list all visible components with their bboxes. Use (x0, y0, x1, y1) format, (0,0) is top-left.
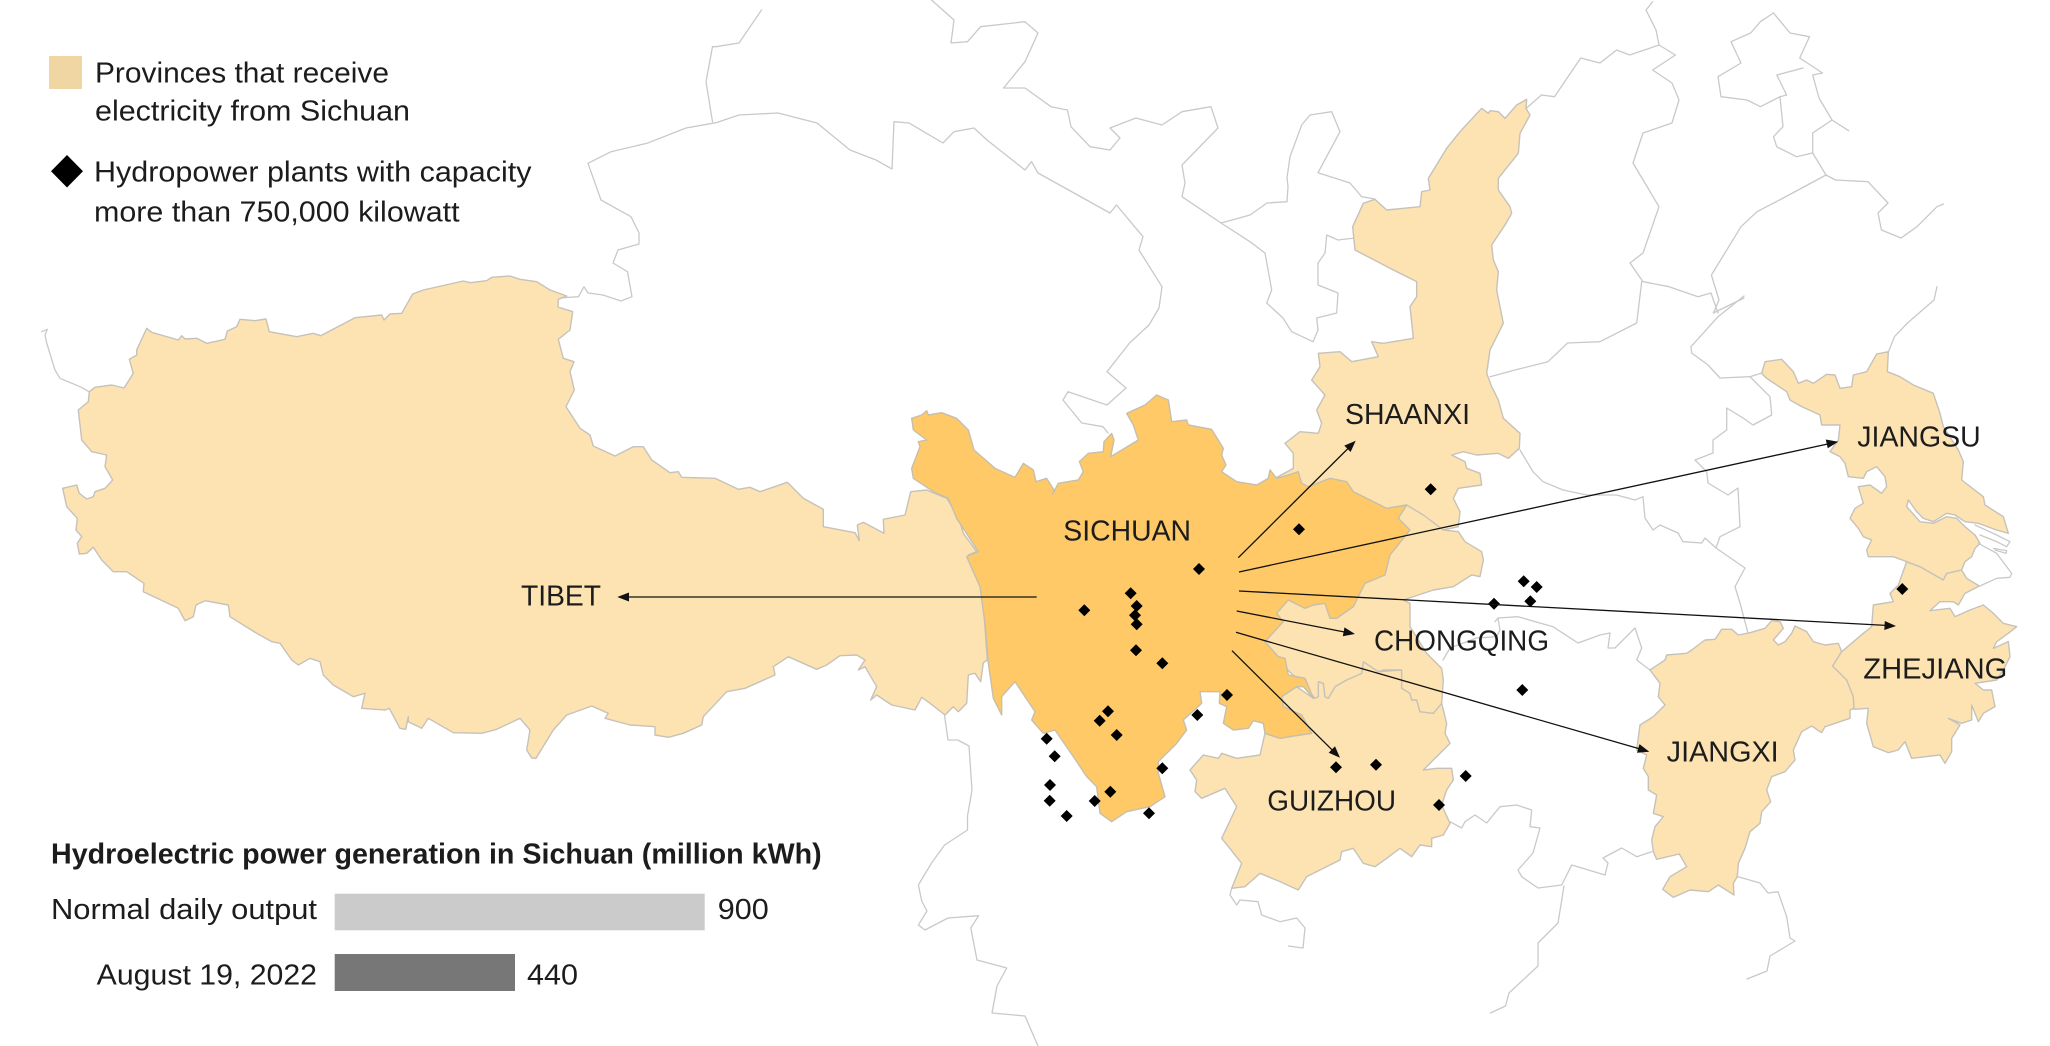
hydropower plant markers (1041, 483, 1908, 822)
legend (49, 56, 532, 229)
legend text: receiving provinces: Provinces that receive (95, 57, 389, 89)
arrow: Sichuan to Jiangsu (1239, 440, 1838, 572)
value: 440: 440 (527, 960, 578, 992)
arrow: Sichuan to Chongqing (1237, 611, 1355, 636)
province: Jiangxi (1637, 621, 1854, 897)
label: ZHEJIANG: ZHEJIANG (1863, 653, 2007, 685)
row label: normal output: Normal daily output (51, 894, 317, 926)
legend text: hydropower plants: Hydropower plants with capacity (94, 157, 532, 189)
label: SICHUAN: SICHUAN (1063, 516, 1191, 548)
province: Guizhou (1190, 662, 1453, 890)
legend swatch: receiving provinces (49, 56, 82, 89)
legend text: receiving provinces (95, 57, 410, 128)
chart heading: Hydroelectric power generation in Sichuan (million kWh) (51, 839, 822, 871)
province: Jiangsu (1762, 352, 2008, 580)
label: SHAANXI: SHAANXI (1345, 399, 1470, 431)
province: Tibet (63, 276, 987, 758)
arrow: Sichuan to Tibet (617, 592, 1037, 602)
bar: normal output (335, 894, 705, 930)
label: GUIZHOU: GUIZHOU (1267, 785, 1396, 817)
bar: August 19, 2022 (335, 954, 515, 991)
arrow: Sichuan to Guizhou (1232, 651, 1340, 758)
legend text: hydropower plants (94, 157, 532, 229)
province: Zhejiang (1833, 562, 2017, 763)
legend text: receiving provinces: electricity from Sichuan (95, 96, 410, 128)
arrow: Sichuan to Zhejiang (1239, 591, 1896, 630)
legend icon: hydropower diamond (51, 155, 83, 188)
label: CHONGQING: CHONGQING (1374, 626, 1549, 658)
province: Sichuan (912, 395, 1410, 822)
province: Shaanxi (1270, 99, 1530, 530)
arrow: Sichuan to Shaanxi (1238, 441, 1356, 558)
label: TIBET: TIBET (521, 581, 601, 613)
value: 900: 900 (718, 894, 769, 926)
arrow: Sichuan to Jiangxi (1236, 632, 1649, 753)
Shanghai and estuary outline (1975, 525, 2012, 586)
label: JIANGXI: JIANGXI (1667, 737, 1779, 769)
bar chart: hydroelectric generation (51, 839, 822, 992)
legend text: hydropower plants: more than 750,000 kilowatt (94, 197, 460, 229)
row label: August 19, 2022: August 19, 2022 (97, 960, 317, 992)
label: JIANGSU: JIANGSU (1857, 422, 1981, 454)
province: Chongqing (1257, 505, 1483, 713)
